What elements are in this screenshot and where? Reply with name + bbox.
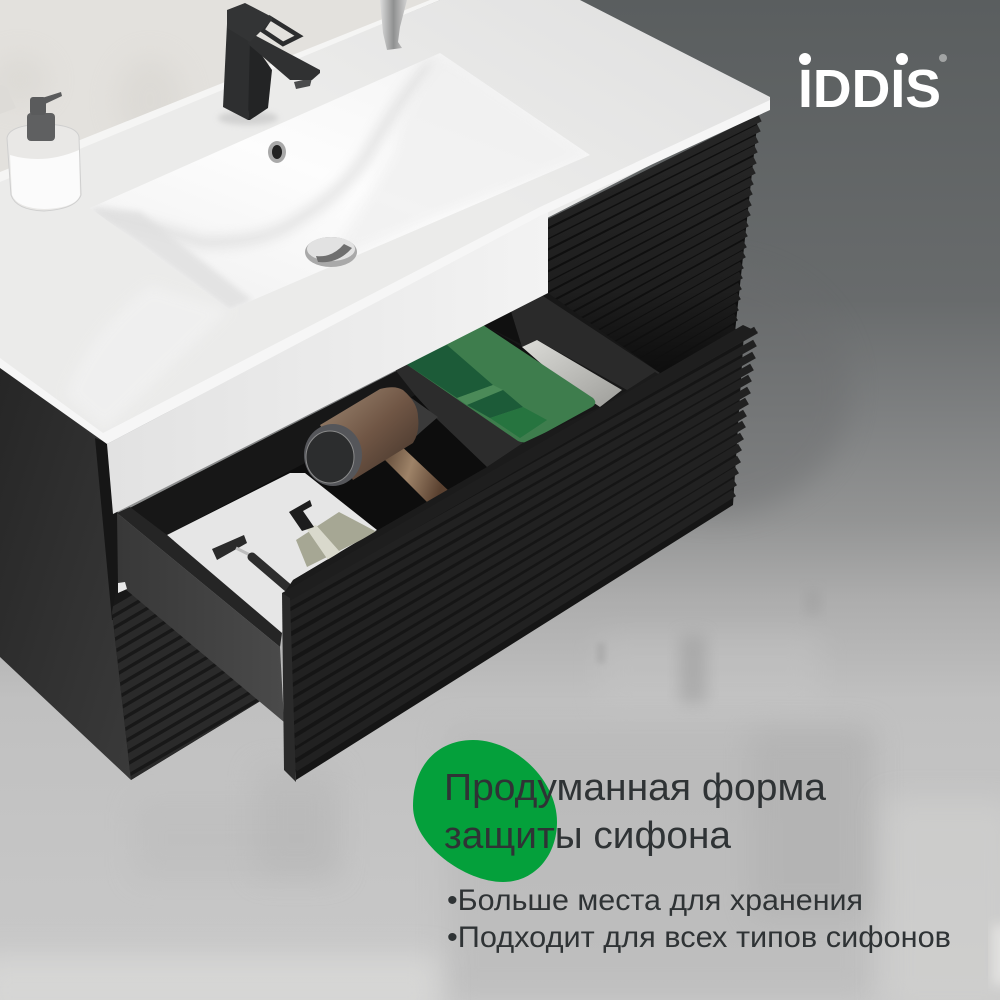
decorative green blob [413, 740, 557, 882]
heading [444, 767, 827, 857]
drawer ribbed front [285, 330, 756, 780]
logo: iDDiS: IDDIS [798, 59, 941, 119]
speck [118, 582, 127, 593]
silver tube [522, 340, 622, 407]
right compartment [480, 296, 660, 407]
drawer side rim [117, 507, 282, 647]
heading: Продуманная форма [444, 767, 827, 809]
cabinet: right ribbed section [540, 116, 760, 443]
cabinet: left side panel [0, 358, 131, 780]
open drawer [117, 293, 758, 782]
soap dish on wall [0, 85, 16, 114]
overflow hole [268, 141, 286, 163]
hair dryer [304, 387, 450, 502]
bullet list [447, 884, 951, 954]
drawer side panel [117, 513, 284, 722]
cabinet: lower drawer ribbed front [112, 590, 260, 780]
cosmetic bottle [289, 500, 377, 567]
white washbasin countertop [0, 0, 770, 514]
interior front band [282, 372, 660, 596]
bullet list: •Больше места для хранения [447, 884, 863, 917]
sink bowl [90, 53, 590, 310]
icon: chrome faucet [380, 0, 407, 50]
icon: soap dispenser [7, 92, 81, 211]
tray partition [393, 362, 523, 467]
green card [403, 323, 595, 442]
towel [167, 473, 377, 633]
drawer floor [167, 395, 487, 580]
drawer top rim [282, 325, 758, 603]
cabinet: dark strip beside drawer [95, 438, 120, 620]
icon: black faucet [218, 3, 320, 125]
drawer front left edge [282, 593, 296, 782]
interior back wall [118, 293, 660, 593]
front lip [0, 100, 770, 444]
front apron [107, 212, 548, 514]
heading: защиты сифона [444, 815, 732, 857]
drain plug [305, 237, 357, 267]
bullet list: •Подходит для всех типов сифонов [447, 921, 951, 954]
razor [212, 535, 287, 587]
wall behind basin [0, 0, 440, 180]
